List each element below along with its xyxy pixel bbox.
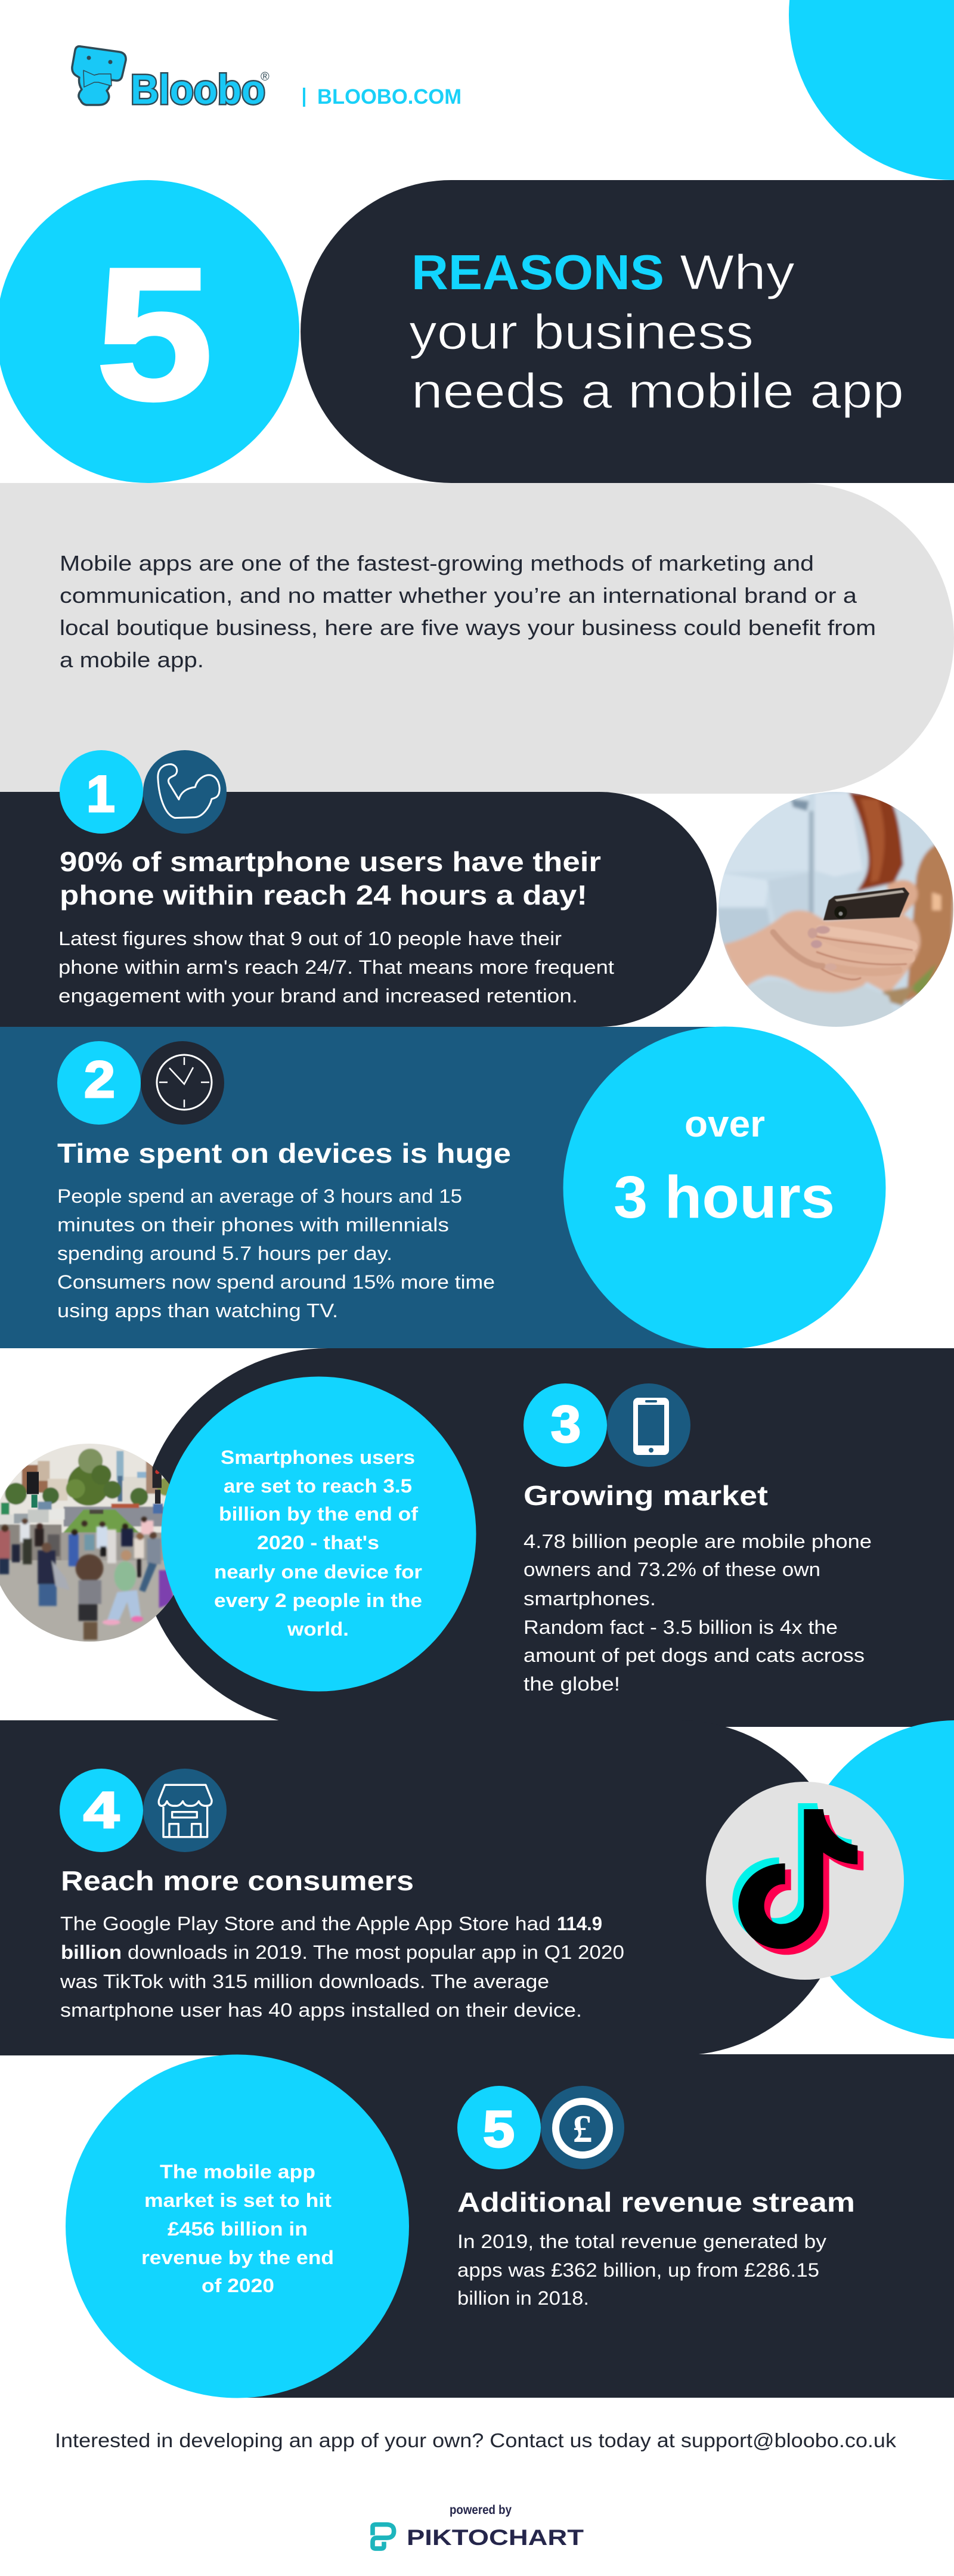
- icon: pound coin: £: [572, 2107, 593, 2151]
- number badge 5: 5: [483, 2101, 515, 2158]
- icon: smartphone: [607, 1383, 690, 1467]
- icon: TikTok logo: [706, 1782, 904, 1980]
- callout: smartphone users: world.: [287, 1618, 349, 1640]
- body text: [457, 2231, 826, 2309]
- panel: reason 5: [237, 2054, 954, 2398]
- body text: spending around 5.7 hours per day.: [57, 1243, 392, 1264]
- title: REASONS: [411, 244, 664, 300]
- body text: In 2019, the total revenue generated by: [457, 2231, 826, 2252]
- crowd figures: [0, 1516, 175, 1640]
- title: [409, 244, 904, 419]
- callout: smartphone users: 2020 - that's: [257, 1532, 379, 1553]
- title: Why: [680, 244, 795, 300]
- body text: [57, 1185, 495, 1321]
- callout: smartphone users: [161, 1376, 476, 1691]
- intro text: local boutique business, here are five ways your business could benefit from: [60, 615, 876, 640]
- panel: reason 2: [0, 1027, 724, 1348]
- number badge 1: [60, 750, 143, 834]
- body text: minutes on their phones with millennials: [57, 1214, 449, 1236]
- registered mark: ®: [261, 70, 270, 83]
- icon: clock: [141, 1041, 224, 1125]
- panel: intro: [0, 483, 954, 794]
- body text: smartphones.: [524, 1588, 656, 1609]
- callout: over 3 hours: [563, 1027, 886, 1349]
- callout: market revenue: market is set to hit: [144, 2190, 332, 2211]
- body text: Consumers now spend around 15% more time: [57, 1271, 495, 1293]
- body text: [58, 928, 614, 1007]
- panel: reason 3: [139, 1348, 954, 1727]
- body text: phone within arm's reach 24/7. That means more frequent: [58, 956, 614, 978]
- title: needs a mobile app: [411, 363, 904, 419]
- body text: Random fact - 3.5 billion is 4x the: [524, 1617, 838, 1638]
- panel: reason 1: [0, 750, 717, 1027]
- callout: smartphone users: every 2 people in the: [214, 1590, 422, 1611]
- photo: hands holding phone: [718, 792, 953, 1027]
- heading: Time spent on devices is huge: [57, 1138, 511, 1169]
- body text: apps was £362 billion, up from £286.15: [457, 2259, 819, 2281]
- body text: smartphone user has 40 apps installed on their device.: [60, 1999, 582, 2021]
- website link: BLOOBO.COM: [317, 85, 461, 109]
- callout: market revenue: revenue by the end: [141, 2247, 334, 2268]
- powered by Piktochart: powered by: [450, 2503, 512, 2517]
- body text: amount of pet dogs and cats across: [524, 1645, 865, 1666]
- heading: [60, 846, 601, 911]
- heading: 90% of smartphone users have their: [60, 846, 601, 877]
- body text: the globe!: [524, 1673, 620, 1695]
- phone in photo: [823, 887, 909, 920]
- body text: engagement with your brand and increased retention.: [58, 985, 578, 1007]
- callout: smartphone users: Smartphones users: [221, 1447, 415, 1468]
- icon: Piktochart mark: [373, 2525, 394, 2549]
- body text: Latest figures show that 9 out of 10 people have their: [58, 928, 562, 949]
- intro text: [60, 551, 876, 672]
- heading: Reach more consumers: [61, 1865, 414, 1896]
- callout: market revenue: £456 billion in: [168, 2218, 308, 2240]
- callout: market revenue: The mobile app: [160, 2161, 315, 2182]
- intro text: Mobile apps are one of the fastest-growing methods of marketing and: [60, 551, 814, 575]
- number badge 3: [524, 1383, 607, 1467]
- decorative cyan corner circle: [789, 0, 954, 180]
- body text: using apps than watching TV.: [57, 1300, 338, 1321]
- body text: [524, 1531, 872, 1695]
- body text: owners and 73.2% of these own: [524, 1559, 820, 1580]
- callout: smartphone users: billion by the end of: [219, 1503, 418, 1525]
- intro text: communication, and no matter whether you’re an international brand or a: [60, 583, 857, 608]
- number badge 5: [457, 2086, 541, 2169]
- heading: phone within reach 24 hours a day!: [60, 880, 587, 911]
- panel: reason 4: [0, 1720, 847, 2055]
- hand details: [773, 926, 912, 980]
- callout: over 3 hours: 3 hours: [614, 1164, 835, 1231]
- callout: smartphone users: nearly one device for: [214, 1561, 422, 1583]
- heading: Additional revenue stream: [457, 2187, 855, 2218]
- body text: 4.78 billion people are mobile phone: [524, 1531, 872, 1552]
- title panel: [301, 180, 954, 483]
- body text: The Google Play Store and the Apple App Store had: [60, 1913, 550, 1934]
- big number circle: 5: [96, 229, 213, 439]
- callout: market revenue: of 2020: [202, 2275, 274, 2296]
- body text: billion in 2018.: [457, 2287, 589, 2309]
- body text: downloads in 2019. The most popular app in Q1 2020: [128, 1942, 624, 1963]
- body text: billion: [61, 1942, 122, 1963]
- callout: smartphone users: are set to reach 3.5: [224, 1475, 412, 1497]
- number badge 2: [57, 1041, 141, 1125]
- body text: [60, 1913, 624, 2021]
- footer contact text: Interested in developing an app of your own? Contact us today at support@bloobo.co.uk: [55, 2429, 897, 2451]
- intro text: a mobile app.: [60, 648, 204, 672]
- title: your business: [409, 304, 754, 360]
- powered by Piktochart: [373, 2503, 584, 2550]
- traffic signals: [27, 1467, 162, 1507]
- logo wordmark: Bloobo: [131, 66, 265, 113]
- number badge 4: 4: [83, 1782, 119, 1839]
- icon: bicep: [143, 750, 227, 834]
- body text: People spend an average of 3 hours and 15: [57, 1185, 462, 1207]
- number badge 3: 3: [551, 1396, 581, 1453]
- number badge 2: 2: [84, 1051, 115, 1109]
- number badge 4: [60, 1769, 143, 1852]
- photo: crowd crossing street: [0, 1444, 174, 1642]
- body text: was TikTok with 315 million downloads. The average: [60, 1971, 549, 1992]
- icon: storefront: [143, 1769, 227, 1852]
- number badge 1: 1: [86, 766, 115, 823]
- decorative cyan circle right: [797, 1720, 954, 2039]
- big number circle: [0, 180, 299, 483]
- icon: pound coin: [541, 2086, 624, 2169]
- logo: Bloobo: [72, 47, 270, 113]
- powered by Piktochart: PIKTOCHART: [407, 2525, 584, 2550]
- heading: Growing market: [524, 1480, 768, 1511]
- callout: over 3 hours: over: [684, 1104, 765, 1145]
- body text: 114.9: [557, 1913, 602, 1934]
- icon: mascot: [72, 47, 126, 105]
- callout: market revenue: [66, 2055, 409, 2398]
